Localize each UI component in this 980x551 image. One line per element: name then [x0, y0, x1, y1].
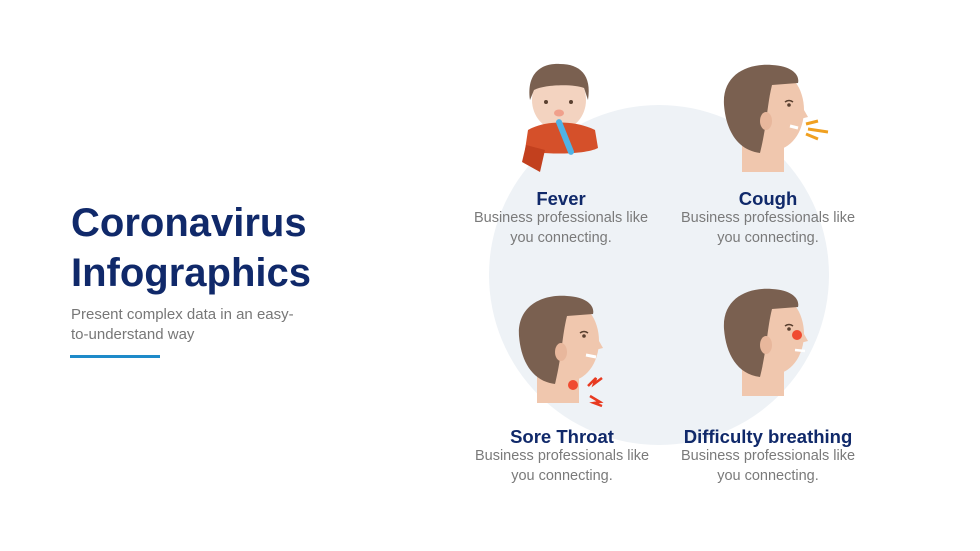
label: sore throat	[475, 426, 649, 484]
icon: cough	[724, 65, 828, 172]
subtitle: Present complex data in an easy-to-understand way	[71, 306, 294, 343]
title: Infographics	[71, 251, 311, 295]
icon: sore throat	[519, 296, 603, 406]
label: cough	[681, 188, 855, 246]
label: cough: Cough	[739, 188, 797, 209]
label: difficulty breathing: Difficulty breathing	[684, 426, 852, 447]
label: sore throat: Business professionals like you connecting.	[475, 448, 649, 484]
label: fever	[474, 188, 648, 246]
label: sore throat: Sore Throat	[510, 426, 614, 447]
title	[71, 201, 311, 295]
icon: fever	[522, 64, 598, 172]
label: cough: Business professionals like you connecting.	[681, 210, 855, 246]
label: difficulty breathing	[681, 426, 855, 484]
label: fever: Business professionals like you connecting.	[474, 210, 648, 246]
title: Coronavirus	[71, 201, 307, 245]
label: difficulty breathing: Business professionals like you connecting.	[681, 448, 855, 484]
accent line	[70, 355, 160, 358]
icon: difficulty breathing	[724, 289, 808, 396]
label: fever: Fever	[536, 188, 586, 209]
